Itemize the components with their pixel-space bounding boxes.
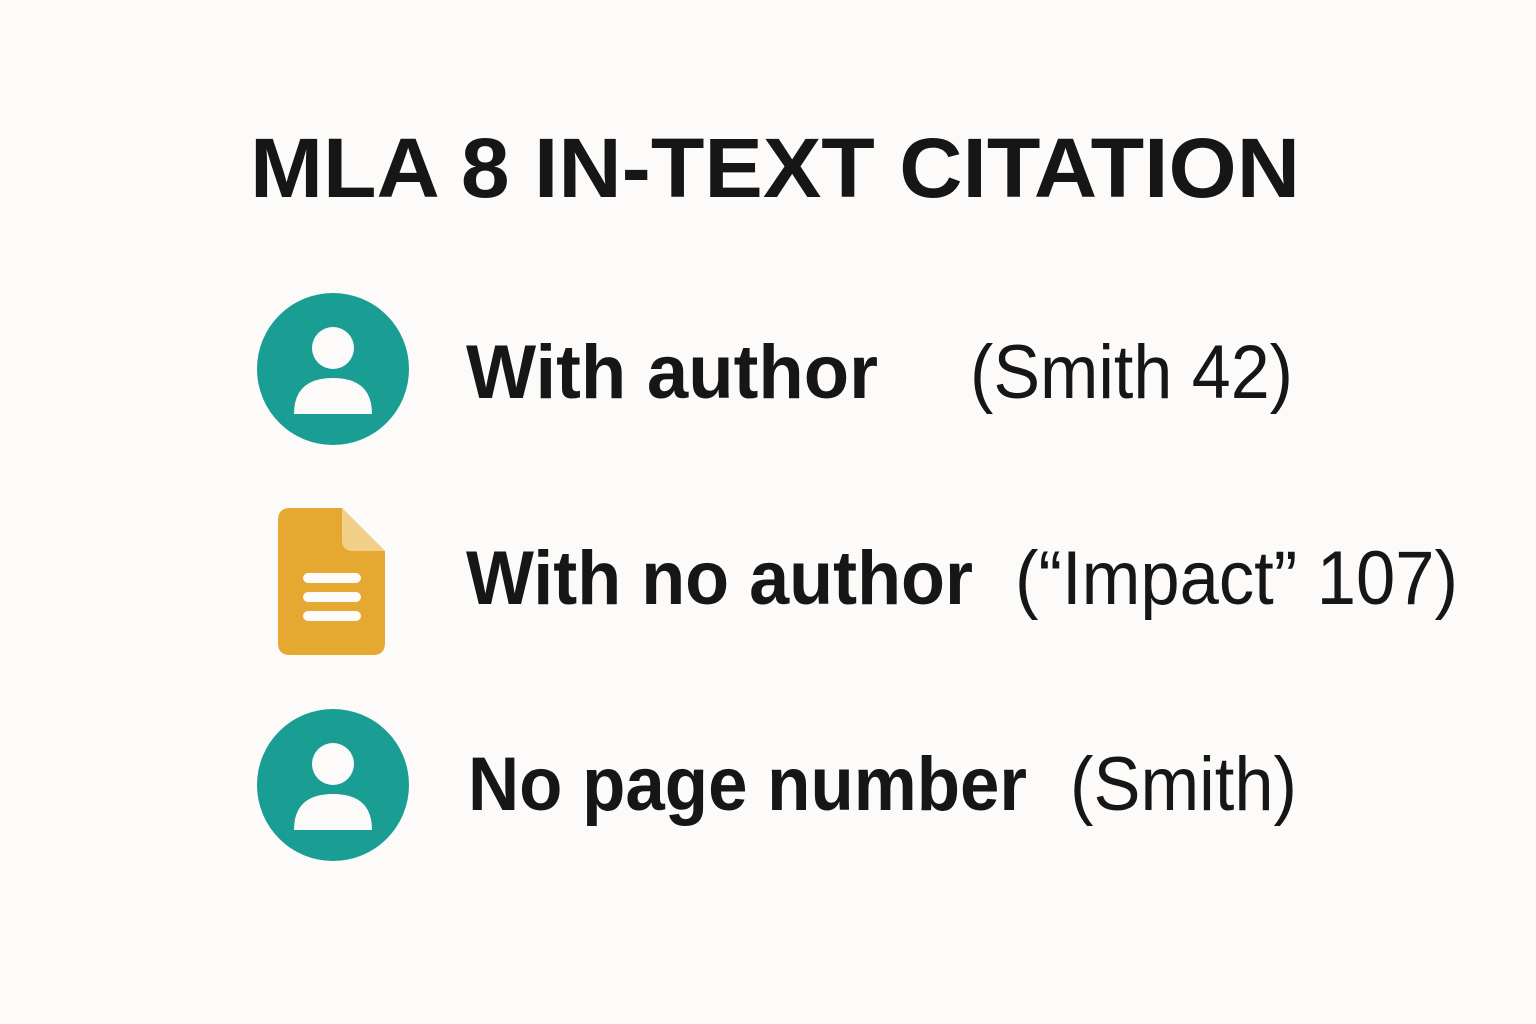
row: no page number [257,709,1297,861]
example: ("Impact" 107): (“Impact” 107) [1015,536,1458,621]
row: with no author [278,508,1458,655]
label: with no author: With no author [466,536,973,621]
icon: person circle [257,293,409,445]
label: no page number: No page number [468,742,1027,827]
icon: document [278,508,385,655]
title: MLA 8 IN-TEXT CITATION [250,121,1300,215]
example: (Smith 42): (Smith 42) [970,330,1293,415]
icon: person circle [257,709,409,861]
label: with author: With author [466,330,878,415]
example: (Smith): (Smith) [1070,742,1297,827]
row: with author [257,293,1293,445]
